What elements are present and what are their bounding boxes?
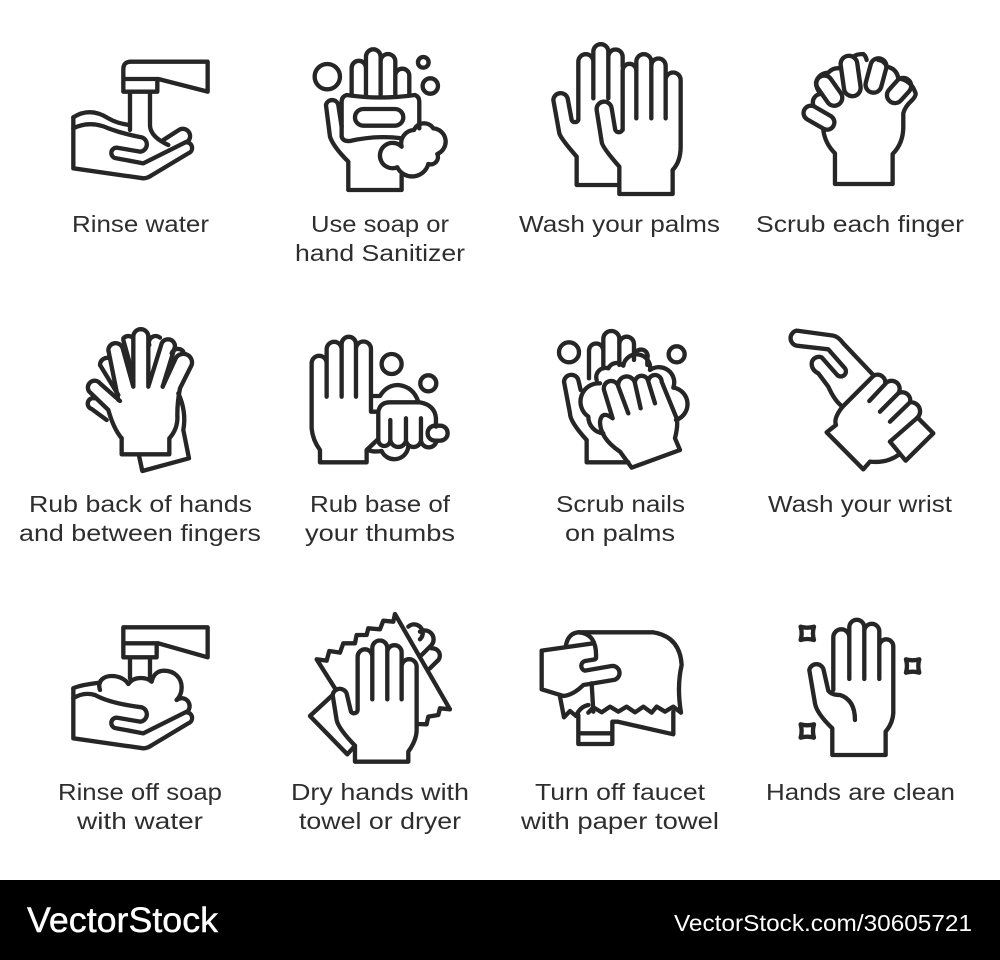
label: rinse water: Rinse water xyxy=(72,211,209,237)
step: rub back of hands xyxy=(19,329,261,546)
step: dry hands xyxy=(291,614,469,834)
icon: overlapping hands xyxy=(88,329,192,471)
icon: two open hands xyxy=(553,44,681,194)
label: dry hands xyxy=(291,779,469,834)
label: dry hands: towel or dryer xyxy=(299,808,461,834)
step: use soap xyxy=(295,49,465,266)
label: rinse off soap: with water xyxy=(76,808,203,834)
label: scrub fingers: Scrub each finger xyxy=(756,211,964,237)
footer image id: VectorStock.com/30605721 xyxy=(674,910,972,936)
label: use soap xyxy=(295,211,465,266)
footer brand: VectorStock xyxy=(27,901,219,940)
label: rinse off soap xyxy=(58,779,222,834)
label: wash wrist: Wash your wrist xyxy=(768,491,953,517)
label: scrub nails: Scrub nails xyxy=(556,491,685,517)
label: rinse off soap: Rinse off soap xyxy=(58,779,222,805)
icon: fingertips on palm with foam xyxy=(559,331,688,468)
label: rub back of hands xyxy=(19,491,261,546)
step: rinse off soap xyxy=(58,627,222,834)
icon: faucet over hand xyxy=(73,62,208,178)
icon: hand gripping wrist xyxy=(791,331,933,469)
icon: hand with soap bar and foam xyxy=(315,49,446,190)
step: wash palms xyxy=(519,44,720,237)
label: rub base of thumbs xyxy=(305,491,455,546)
label: rub base of thumbs: your thumbs xyxy=(305,520,455,546)
label: hands are clean: Hands are clean xyxy=(766,779,955,805)
label: rub back of hands: Rub back of hands xyxy=(29,491,252,517)
step: scrub fingers xyxy=(756,54,964,237)
icon: hand with towel xyxy=(310,614,450,762)
step: scrub nails xyxy=(556,331,688,546)
icon: hand with interlaced fingers xyxy=(801,54,916,184)
step: hands are clean xyxy=(766,620,955,805)
icon: hand gripping thumb with foam xyxy=(312,337,448,462)
step: rinse water xyxy=(72,62,209,237)
label: rub base of thumbs: Rub base of xyxy=(310,491,451,517)
label: scrub nails: on palms xyxy=(565,520,675,546)
label: use soap: Use soap or xyxy=(311,211,449,237)
label: turn off faucet: Turn off faucet xyxy=(535,779,706,805)
label: use soap: hand Sanitizer xyxy=(295,240,465,266)
step: turn off faucet xyxy=(520,632,719,834)
footer bar xyxy=(0,880,1000,960)
icon: faucet over foamy hand xyxy=(73,627,208,748)
step: wash wrist xyxy=(768,331,953,517)
icon: clean hand with sparkles xyxy=(801,620,919,755)
label: scrub nails xyxy=(556,491,685,546)
step: rub base of thumbs xyxy=(305,337,455,546)
label: wash palms: Wash your palms xyxy=(519,211,720,237)
label: turn off faucet: with paper towel xyxy=(520,808,719,834)
label: rub back of hands: and between fingers xyxy=(19,520,261,546)
label: dry hands: Dry hands with xyxy=(291,779,469,805)
icon: hand with paper towel on faucet xyxy=(542,632,682,744)
label: turn off faucet xyxy=(520,779,719,834)
